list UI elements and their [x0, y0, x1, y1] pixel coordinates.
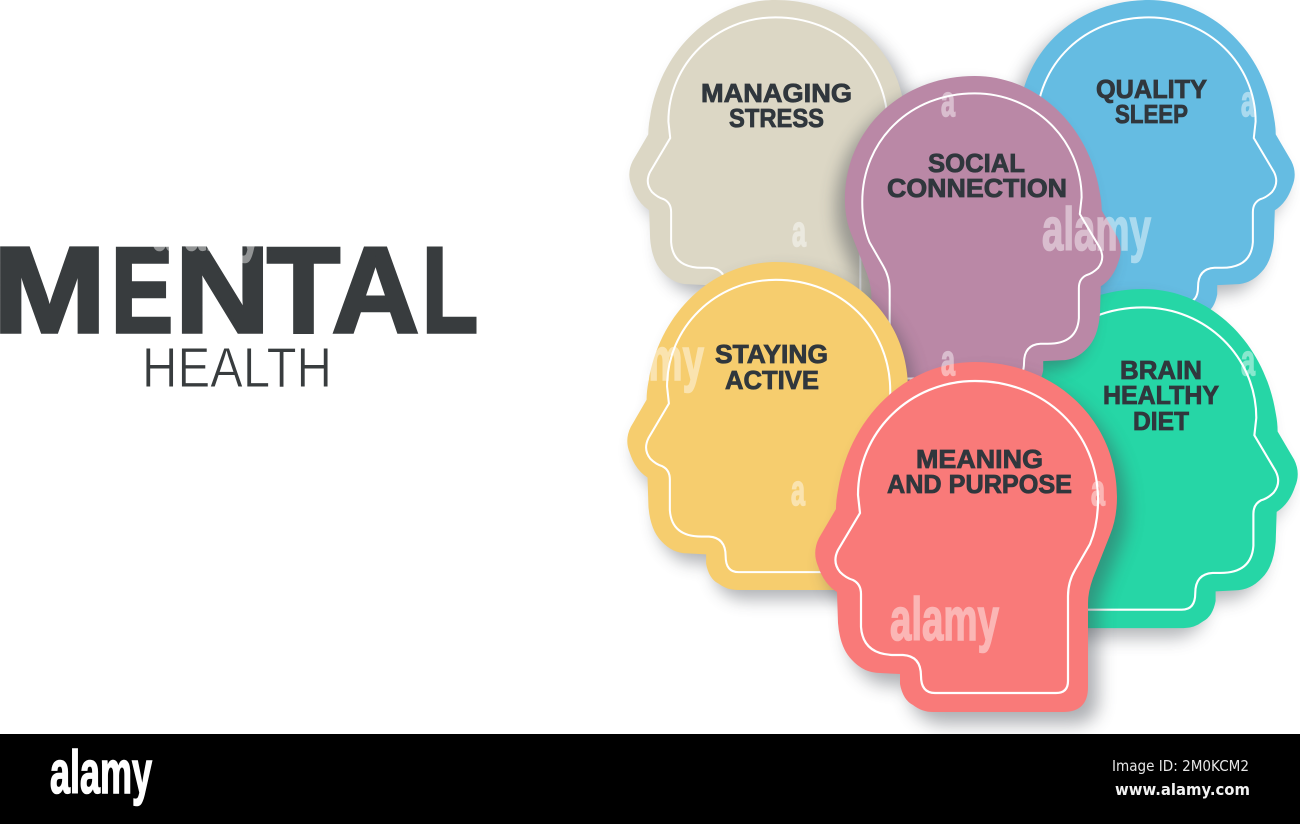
head: staying active [627, 262, 915, 599]
watermarks: a [1091, 466, 1105, 515]
watermarks: alamy [1042, 196, 1151, 263]
watermarks: a [1241, 336, 1255, 385]
label: staying active [715, 339, 828, 395]
footer logo: alamy [50, 739, 152, 806]
image id: Image ID: 2M0KCM2 [1112, 757, 1249, 775]
label: meaning and purpose: AND PURPOSE [887, 469, 1072, 499]
title: mental health [0, 222, 478, 400]
heading: MENTAL: T [267, 222, 340, 358]
shape: blue head [1010, 0, 1295, 329]
label: social connection [887, 148, 1067, 203]
label: brain healthy diet: BRAIN [1120, 355, 1202, 385]
head: brain healthy diet [996, 289, 1298, 638]
shape: purple head [836, 76, 1121, 405]
subheading: HEALTH: HEALTH [142, 336, 332, 400]
watermarks: a [791, 466, 805, 515]
label: quality sleep: SLEEP [1115, 99, 1188, 129]
label: managing stress [701, 78, 852, 133]
footer bar [0, 734, 1300, 824]
watermarks: a [1241, 77, 1255, 126]
heading: MENTAL: N [175, 222, 270, 358]
head: meaning and purpose [815, 362, 1127, 724]
label: quality sleep: QUALITY [1096, 74, 1207, 104]
shape: yellow head [627, 262, 915, 599]
website: www.alamy.com [1115, 780, 1250, 799]
label: brain healthy diet [1103, 355, 1219, 436]
watermarks: a [941, 336, 955, 385]
head: managing stress [629, 0, 914, 329]
shape: red head [815, 362, 1127, 724]
watermarks: a [792, 207, 806, 256]
heading: MENTAL: L [422, 222, 478, 358]
label: staying active: STAYING [715, 339, 828, 369]
watermarks: alamy [595, 326, 704, 393]
label: staying active: ACTIVE [725, 365, 819, 395]
label: social connection: CONNECTION [887, 173, 1067, 203]
head: social connection [836, 76, 1121, 405]
heading: MENTAL: E [111, 222, 173, 358]
label: brain healthy diet: DIET [1133, 406, 1189, 436]
label: meaning and purpose: MEANING [916, 444, 1043, 474]
watermarks [152, 77, 1255, 653]
watermarks: a [941, 77, 955, 126]
label: quality sleep [1096, 74, 1207, 129]
shape: beige head [629, 0, 914, 329]
head: quality sleep [1010, 0, 1295, 329]
label: meaning and purpose [887, 444, 1072, 499]
label: managing stress: STRESS [729, 103, 824, 133]
watermarks: alamy [890, 586, 999, 653]
watermarks: alamy [152, 196, 261, 263]
label: social connection: SOCIAL [928, 148, 1025, 178]
label: brain healthy diet: HEALTHY [1103, 380, 1219, 410]
shape: green head [996, 289, 1298, 638]
heading: MENTAL: A [332, 222, 419, 358]
label: managing stress: MANAGING [701, 78, 852, 108]
